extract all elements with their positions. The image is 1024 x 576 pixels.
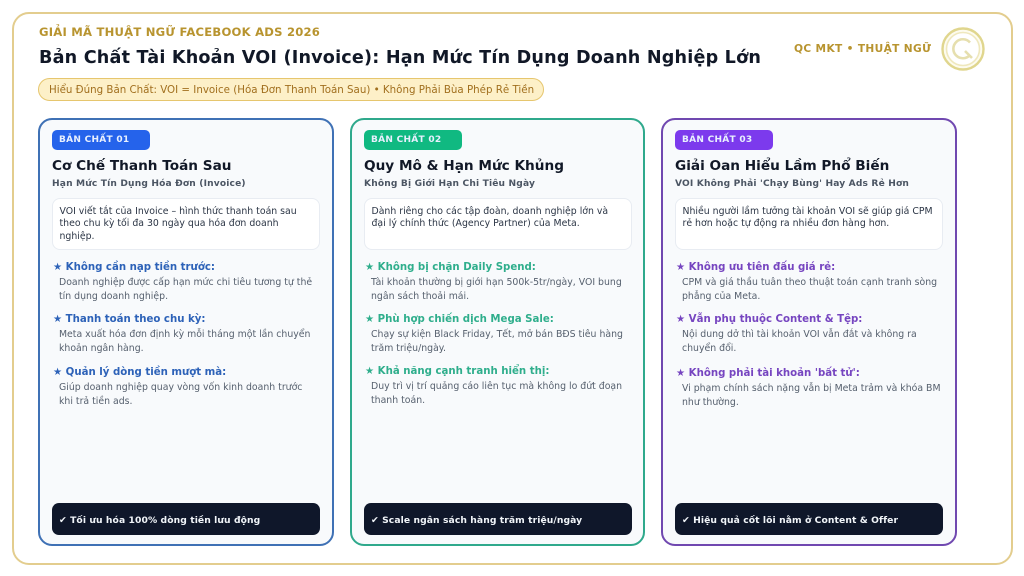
item: mega sale: trăm triệu/ngày. — [371, 343, 446, 354]
item: không cần nạp tiền: tín dụng doanh nghiệp. — [59, 291, 168, 302]
badge 01 — [52, 130, 150, 150]
item: daily spend: ngân sách thoải mái. — [371, 291, 469, 302]
title: Bản Chất Tài Khoản VOI (Invoice): Hạn Mức Tín Dụng Doanh Nghiệp Lớn — [39, 48, 761, 68]
card 03 footer: ✔ Hiệu quả cốt lõi nằm ở Content & Offer — [682, 515, 898, 526]
card 03 description — [675, 198, 943, 250]
item: mega sale: Chạy sự kiện Black Friday, Tết, mở bán BĐS tiêu hàng — [371, 329, 623, 340]
card 03 description: Nhiều người lầm tưởng tài khoản VOI sẽ giúp giá CPM — [682, 206, 933, 217]
subtitle pill: Hiểu Đúng Bản Chất: VOI = Invoice (Hóa Đơn Thanh Toán Sau) • Không Phải Bùa Phép Rẻ Tiền — [49, 84, 534, 96]
card 01 footer — [52, 503, 320, 535]
item: quản lý dòng tiền: ★ Quản lý dòng tiền mượt mà: — [53, 367, 226, 378]
item: không cần nạp tiền: Doanh nghiệp được cấp hạn mức chi tiêu tương tự thẻ — [59, 277, 312, 288]
item: content và tệp: ★ Vẫn phụ thuộc Content & Tệp: — [676, 314, 862, 325]
item: cạnh tranh hiển thị: thanh toán. — [371, 395, 425, 406]
badge 03 — [675, 130, 773, 150]
item: không cần nạp tiền: ★ Không cần nạp tiền trước: — [53, 262, 215, 273]
item: bất tử: Vi phạm chính sách nặng vẫn bị Meta trảm và khóa BM — [682, 383, 941, 394]
item: đấu giá: phẳng của Meta. — [682, 291, 760, 302]
badge 02: BẢN CHẤT 02 — [371, 135, 441, 145]
item: daily spend: ★ Không bị chặn Daily Spend: — [365, 262, 536, 273]
card 01 heading: Cơ Chế Thanh Toán Sau — [52, 158, 232, 174]
brand label: QC MKT • THUẬT NGỮ — [794, 43, 931, 55]
card 01 description — [52, 198, 320, 250]
item: content và tệp: Nội dung dở thì tài khoản VOI vẫn đắt và không ra — [682, 329, 917, 340]
panel: card 01 — [38, 118, 334, 546]
panel: card 03 — [661, 118, 957, 546]
card 01 footer: ✔ Tối ưu hóa 100% dòng tiền lưu động — [59, 515, 260, 526]
item: cạnh tranh hiển thị — [365, 364, 622, 406]
item: thanh toán theo chu kỳ: Meta xuất hóa đơn định kỳ mỗi tháng một lần chuyển — [59, 329, 310, 340]
card 01 description: theo chu kỳ tối đa 30 ngày qua hóa đơn doanh — [60, 218, 279, 229]
item: quản lý dòng tiền: khi trả tiền ads. — [59, 396, 132, 407]
card 03 footer — [675, 503, 943, 535]
item: daily spend: Tài khoản thường bị giới hạn 500k-5tr/ngày, VOI bung — [371, 277, 622, 288]
panel: card 02 — [350, 118, 645, 546]
item: cạnh tranh hiển thị: Duy trì vị trí quảng cáo liên tục mà không lo đứt đoạn — [371, 381, 622, 392]
item: daily spend — [365, 261, 622, 302]
card 02 heading: Quy Mô & Hạn Mức Khủng — [364, 158, 564, 174]
card 01 description: VOI viết tắt của Invoice – hình thức thanh toán sau — [60, 206, 297, 217]
card 02 description: đại lý chính thức (Agency Partner) của Meta. — [372, 218, 580, 229]
item: content và tệp: chuyển đổi. — [682, 343, 736, 354]
item: đấu giá: ★ Không ưu tiên đấu giá rẻ: — [676, 262, 835, 273]
card 01 subheading: Hạn Mức Tín Dụng Hóa Đơn (Invoice) — [52, 179, 246, 189]
item: quản lý dòng tiền: Giúp doanh nghiệp quay vòng vốn kinh doanh trước — [59, 382, 302, 393]
item: đấu giá: CPM và giá thầu tuân theo thuật toán cạnh tranh sòng — [682, 277, 937, 288]
card 01 description: nghiệp. — [60, 231, 95, 242]
badge 01: BẢN CHẤT 01 — [59, 135, 129, 145]
subtitle pill — [38, 78, 544, 101]
item: bất tử — [676, 366, 941, 408]
card 02 subheading: Không Bị Giới Hạn Chi Tiêu Ngày — [364, 179, 535, 189]
item: mega sale: ★ Phù hợp chiến dịch Mega Sale: — [365, 314, 554, 325]
item: cạnh tranh hiển thị: ★ Khả năng cạnh tranh hiển thị: — [365, 366, 549, 377]
item: không cần nạp tiền — [53, 260, 312, 302]
badge 02 — [364, 130, 462, 150]
item: thanh toán theo chu kỳ: ★ Thanh toán theo chu kỳ: — [53, 314, 206, 325]
item: bất tử: như thường. — [682, 397, 739, 408]
card 02 footer: ✔ Scale ngân sách hàng trăm triệu/ngày — [371, 515, 582, 526]
item: bất tử: ★ Không phải tài khoản 'bất tử': — [676, 368, 860, 379]
item: quản lý dòng tiền — [53, 366, 302, 407]
card 03 heading: Giải Oan Hiểu Lầm Phổ Biến — [675, 158, 889, 174]
icon: brand logo — [941, 27, 985, 71]
eyebrow heading: GIẢI MÃ THUẬT NGỮ FACEBOOK ADS 2026 — [39, 25, 320, 39]
badge 03: BẢN CHẤT 03 — [682, 135, 752, 145]
card 02 description: Dành riêng cho các tập đoàn, doanh nghiệp lớn và — [372, 206, 608, 217]
item: đấu giá — [676, 260, 937, 302]
card 03 description: rẻ hơn hoặc tự động ra nhiều đơn hàng hơn. — [682, 218, 889, 229]
item: content và tệp — [676, 312, 917, 354]
card 02 footer — [364, 503, 632, 535]
card 03 subheading: VOI Không Phải 'Chạy Bùng' Hay Ads Rẻ Hơn — [675, 179, 909, 189]
item: thanh toán theo chu kỳ: khoản ngân hàng. — [59, 343, 144, 354]
item: mega sale — [365, 312, 623, 354]
item: thanh toán theo chu kỳ — [53, 313, 310, 354]
card 02 description — [364, 198, 632, 250]
